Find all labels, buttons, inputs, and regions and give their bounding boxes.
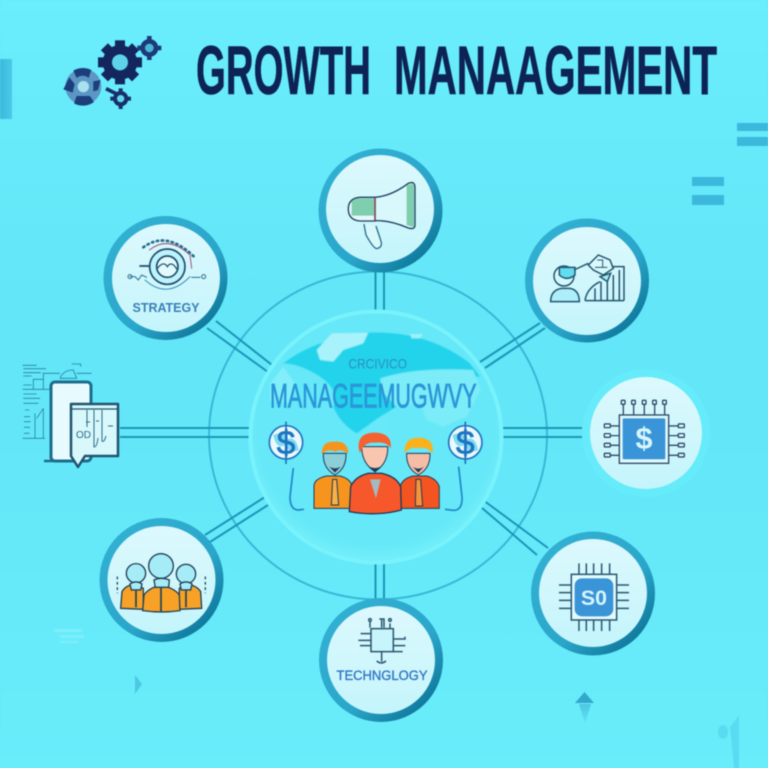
icon: speech bubble: OD: [76, 430, 91, 441]
title: [196, 32, 717, 109]
icon: processor chip: S0: [581, 586, 607, 610]
hub small heading: CRCIVICO: [348, 355, 407, 371]
world map: [270, 332, 481, 433]
central hub: [249, 310, 503, 564]
icon: dollar coin right: [445, 422, 482, 510]
small gear bottom: [106, 88, 131, 109]
panel: team: [100, 518, 224, 642]
decorative bars top right: [737, 123, 768, 146]
icon: worker with chart: [551, 255, 624, 302]
decorative bars right: [692, 177, 724, 205]
team: centre person: [349, 433, 401, 514]
icon: dollar coin right: $: [456, 425, 475, 462]
icon: tablet: [51, 382, 91, 461]
small triangle lower left: [135, 675, 142, 694]
team: right person: [401, 438, 439, 508]
small gear top right: [137, 36, 161, 60]
icon: gears: [63, 36, 161, 109]
icon: team of three: [117, 554, 205, 612]
icon: sketch annotations: [23, 364, 92, 438]
panel: processor: [531, 532, 655, 656]
icon: megaphone: [348, 183, 415, 249]
panel: technology: [319, 598, 443, 722]
panel: strategy: [104, 216, 228, 340]
icon: dollar chip: $: [635, 422, 653, 456]
faint shape bottom right: [718, 715, 739, 768]
large gear: [98, 40, 142, 84]
label: technology: TECHNGLOGY: [336, 668, 428, 683]
panel: analytics worker: [525, 218, 649, 342]
faint lines lower left: [54, 629, 84, 643]
outer ring: [209, 272, 547, 600]
icon: dollar coin left: $: [277, 425, 295, 462]
connectors: [120, 265, 582, 606]
decorative bar left: [0, 59, 12, 119]
panel: megaphone: [318, 148, 442, 272]
panel: dollar chip: [582, 369, 710, 497]
team: left person: [314, 442, 352, 508]
icon: dollar coin left: [269, 422, 304, 510]
panel: mobile devices: [23, 364, 118, 467]
icon: circuit: [358, 619, 405, 663]
label: strategy: STRATEGY: [132, 300, 200, 315]
small arrow lower right: [575, 692, 594, 724]
hub main heading: MANAGEEMUGWVY: [270, 377, 477, 415]
title: GROWTH: [196, 32, 371, 109]
blue segmented gear: [63, 68, 101, 106]
icon: strategy target: [128, 240, 206, 289]
